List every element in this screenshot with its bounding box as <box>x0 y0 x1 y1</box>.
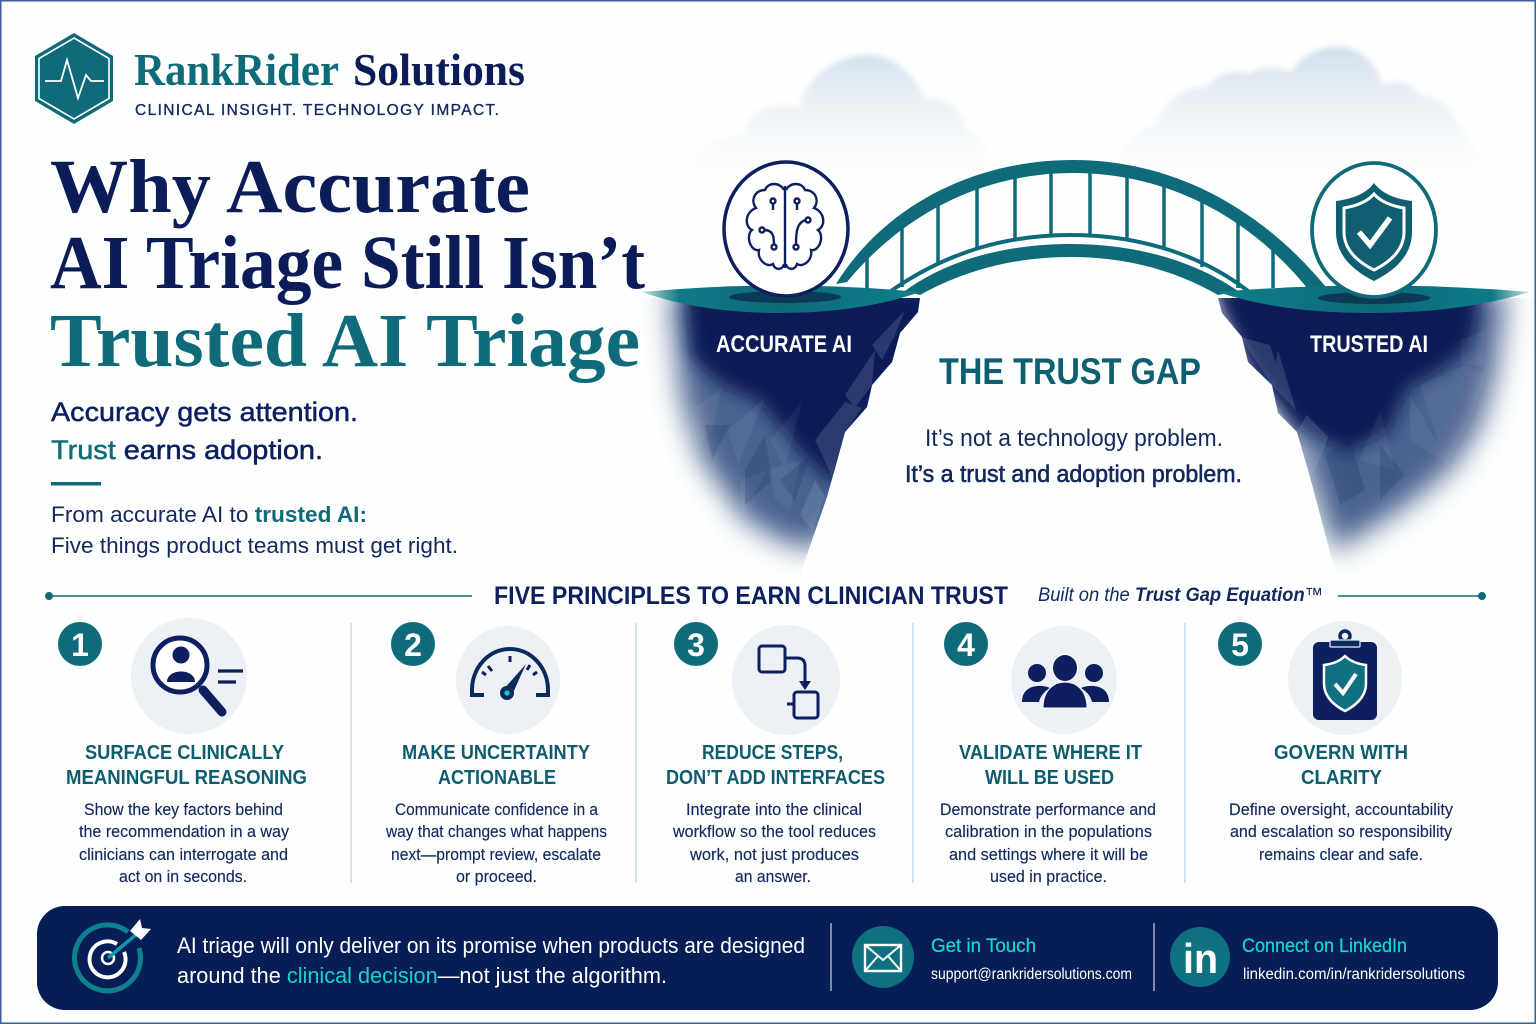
subtitle: Accuracy gets attention. <box>51 397 358 427</box>
tagline: CLINICAL INSIGHT. TECHNOLOGY IMPACT. <box>135 102 499 119</box>
number badge 4 <box>944 622 988 666</box>
illustration: clouds <box>690 47 1480 180</box>
text: trust gap explanation: It’s not a technology problem. <box>925 425 1223 452</box>
number badge 2 <box>391 622 435 666</box>
number badge 1 <box>58 622 102 666</box>
icon: brain in circle <box>724 162 848 296</box>
body 1 <box>79 801 290 886</box>
heading 1: SURFACE CLINICALLY <box>85 742 285 764</box>
illustration: left cliff labelled Accurate AI <box>670 285 935 548</box>
icon: clipboard with shield <box>1288 621 1402 735</box>
body 3: an answer. <box>735 868 811 886</box>
panel: principle 2 <box>385 622 607 886</box>
heading 5 <box>1274 742 1408 789</box>
icon: shield in circle <box>1312 163 1436 297</box>
contact: linkedin: Connect on LinkedIn <box>1242 936 1407 957</box>
body 3: workflow so the tool reduces <box>672 823 876 841</box>
heading 4: WILL BE USED <box>985 767 1114 789</box>
number badge 5: 5 <box>1231 627 1249 663</box>
body 4: calibration in the populations <box>945 823 1152 841</box>
label: trusted AI: TRUSTED AI <box>1310 331 1428 358</box>
body 2: or proceed. <box>456 868 537 886</box>
contact: linkedin <box>1170 927 1465 987</box>
panel: principle 5 <box>1218 621 1454 864</box>
heading 1 <box>66 742 307 789</box>
heading 5: CLARITY <box>1301 767 1383 789</box>
body 3 <box>672 801 876 886</box>
title: Why Accurate <box>50 145 530 229</box>
contact: email <box>852 926 1132 988</box>
heading: the trust gap: THE TRUST GAP <box>939 351 1201 392</box>
footer banner <box>37 906 1498 1010</box>
logo: hexagon with pulse line <box>35 33 113 124</box>
section heading rule <box>46 592 1486 600</box>
text: trust gap explanation: It’s a trust and adoption problem. <box>905 461 1242 488</box>
brand name: Solutions <box>353 45 525 95</box>
body 5: and escalation so responsibility <box>1230 823 1453 841</box>
intro text: Five things product teams must get right. <box>51 533 458 558</box>
number badge 3 <box>674 622 718 666</box>
heading 3: REDUCE STEPS, <box>702 742 843 764</box>
rock facets <box>690 310 905 530</box>
heading 5: GOVERN WITH <box>1274 742 1408 764</box>
number badge 3: 3 <box>687 627 705 663</box>
brand name: RankRider <box>134 45 339 95</box>
accent bar <box>51 482 101 486</box>
body 5 <box>1229 801 1454 864</box>
illustration: bridge with arch, hangers and deck <box>836 160 1330 295</box>
contact: linkedin: in <box>1183 935 1218 982</box>
brand name <box>134 45 525 95</box>
body 3: Integrate into the clinical <box>686 801 862 819</box>
body 2: way that changes what happens <box>385 823 607 841</box>
contact: email: Get in Touch <box>931 936 1036 957</box>
body 1: the recommendation in a way <box>79 823 290 841</box>
section heading: FIVE PRINCIPLES TO EARN CLINICIAN TRUST <box>494 582 1008 610</box>
number badge 1: 1 <box>71 627 89 663</box>
number badge 2: 2 <box>404 627 422 663</box>
heading 4: VALIDATE WHERE IT <box>959 742 1142 764</box>
body 4: Demonstrate performance and <box>940 801 1156 819</box>
body 1: Show the key factors behind <box>84 801 283 819</box>
body 4 <box>940 801 1156 886</box>
body 1: clinicians can interrogate and <box>79 846 288 864</box>
section subheading: Built on the Trust Gap Equation™ <box>1038 585 1323 606</box>
panel: principle 1 <box>58 618 307 886</box>
subtitle: Trust earns adoption. <box>51 435 323 465</box>
title <box>50 145 645 383</box>
body 3: work, not just produces <box>689 846 859 864</box>
body 2: next—prompt review, escalate <box>391 846 601 864</box>
heading 3 <box>666 742 885 789</box>
body 5: remains clear and safe. <box>1259 846 1423 864</box>
contact: linkedin: linkedin.com/in/rankridersolutions <box>1243 966 1465 983</box>
heading 3: DON’T ADD INTERFACES <box>666 767 885 789</box>
footer message: around the clinical decision—not just the algorithm. <box>177 963 667 988</box>
illustration: cliff top platforms <box>642 286 1530 313</box>
contact: email: support@rankridersolutions.com <box>931 966 1132 983</box>
intro text <box>51 502 458 558</box>
body 2 <box>385 801 607 886</box>
icon: gauge <box>456 626 560 734</box>
label: accurate AI: ACCURATE AI <box>716 331 852 358</box>
title: AI Triage Still Isn’t <box>50 221 645 305</box>
heading 2: MAKE UNCERTAINTY <box>402 742 591 764</box>
panel: principle 4 <box>940 622 1156 886</box>
number badge 5 <box>1218 622 1262 666</box>
rock facets <box>1240 330 1485 505</box>
panel: principle 3 <box>666 622 885 886</box>
number badge 4: 4 <box>957 627 975 663</box>
icon: workflow boxes with arrow <box>732 625 840 735</box>
heading 2 <box>402 742 591 789</box>
subtitle <box>51 397 358 465</box>
illustration: right cliff labelled Trusted AI <box>1212 285 1506 552</box>
body 2: Communicate confidence in a <box>395 801 599 819</box>
body 4: and settings where it will be <box>949 846 1148 864</box>
intro text: From accurate AI to trusted AI: <box>51 502 367 527</box>
footer message: AI triage will only deliver on its promise when products are designed <box>177 933 805 958</box>
heading 2: ACTIONABLE <box>438 767 556 789</box>
footer message <box>177 933 805 988</box>
icon: target with dart <box>75 919 151 991</box>
title: Trusted AI Triage <box>50 299 640 383</box>
body 1: act on in seconds. <box>119 868 247 886</box>
text: trust gap explanation <box>905 425 1242 488</box>
body 4: used in practice. <box>990 868 1107 886</box>
icon: magnifier with person <box>131 618 247 734</box>
heading 1: MEANINGFUL REASONING <box>66 767 307 789</box>
heading 4 <box>959 742 1142 789</box>
icon: group of people <box>1011 626 1117 734</box>
body 5: Define oversight, accountability <box>1229 801 1454 819</box>
